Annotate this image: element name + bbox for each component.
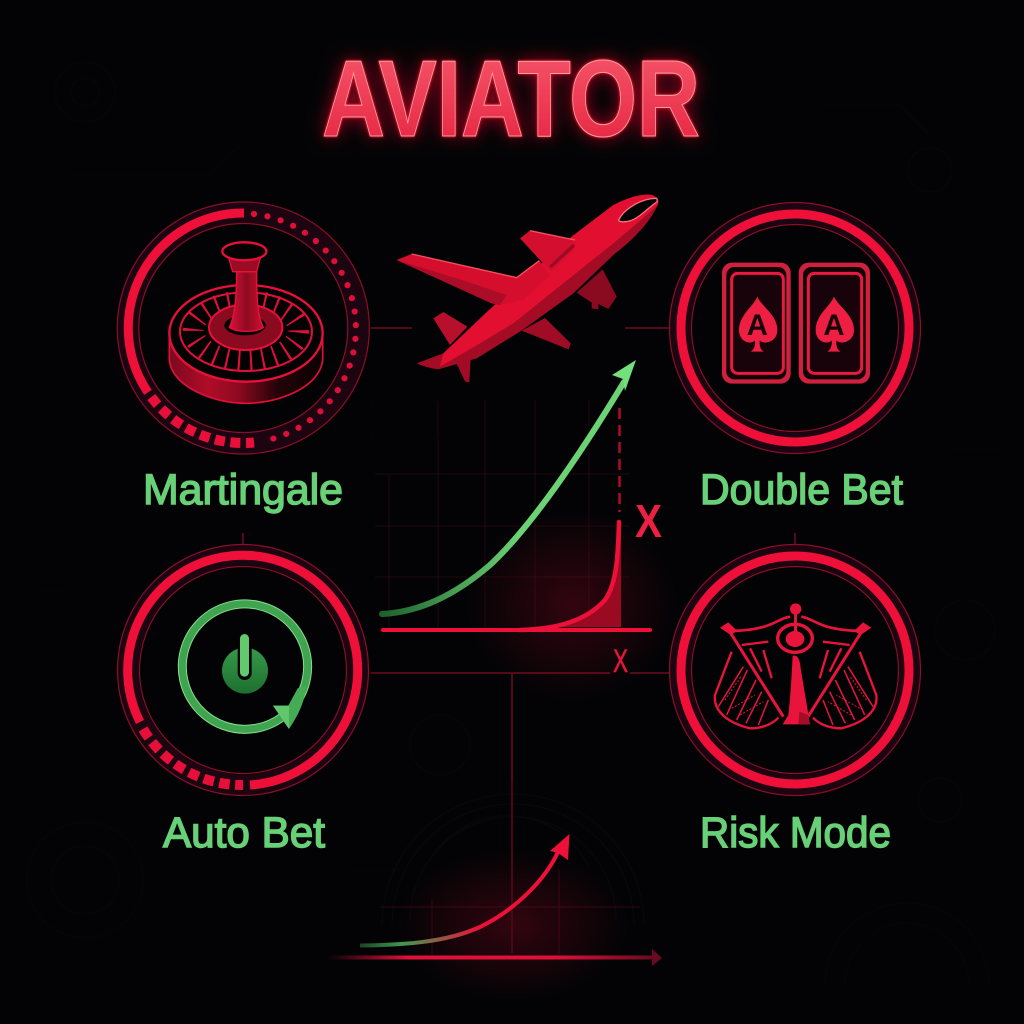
label: risk mode: Risk Mode (700, 809, 891, 857)
icon: red airplane (397, 195, 658, 382)
chart: crash curve (375, 360, 677, 700)
label: double bet: Double Bet (700, 466, 903, 514)
rising arrow (360, 834, 570, 946)
icon: two ace cards: A (747, 309, 768, 342)
baseline axis (381, 628, 652, 632)
vertical connector (511, 780, 513, 953)
dial: auto bet ring (118, 544, 368, 796)
panel: auto bet (118, 544, 368, 796)
green rising arrow (382, 360, 636, 614)
chart glow (398, 850, 628, 1000)
icon: risk scales (715, 603, 877, 728)
panel: double bet (670, 202, 920, 454)
panel: martingale (117, 202, 369, 454)
chart: bottom growth curve (327, 780, 662, 1000)
small x marker: X (613, 643, 628, 679)
icon: two ace cards (722, 263, 870, 384)
axis arrow (327, 949, 662, 966)
red spike area (555, 520, 621, 627)
icon: green power cycle (182, 604, 308, 729)
dial: risk mode ring (670, 544, 920, 796)
label: auto bet: Auto Bet (163, 809, 325, 857)
label: martingale: Martingale (143, 466, 343, 514)
title: AVIATOR (322, 38, 700, 160)
panel: risk mode (670, 544, 920, 796)
icon: two ace cards: A (823, 309, 845, 342)
chart glow (467, 510, 677, 700)
red spike curve (520, 522, 619, 630)
dial: martingale ring (117, 202, 369, 454)
large x marker: X (635, 495, 662, 547)
faint arcs (382, 794, 644, 925)
chart grid (375, 400, 630, 627)
dial: double bet ring (670, 202, 920, 454)
chart grid (380, 870, 640, 955)
dashed level line (618, 408, 621, 512)
connector lines (243, 328, 795, 780)
icon: roulette wheel (169, 242, 323, 403)
